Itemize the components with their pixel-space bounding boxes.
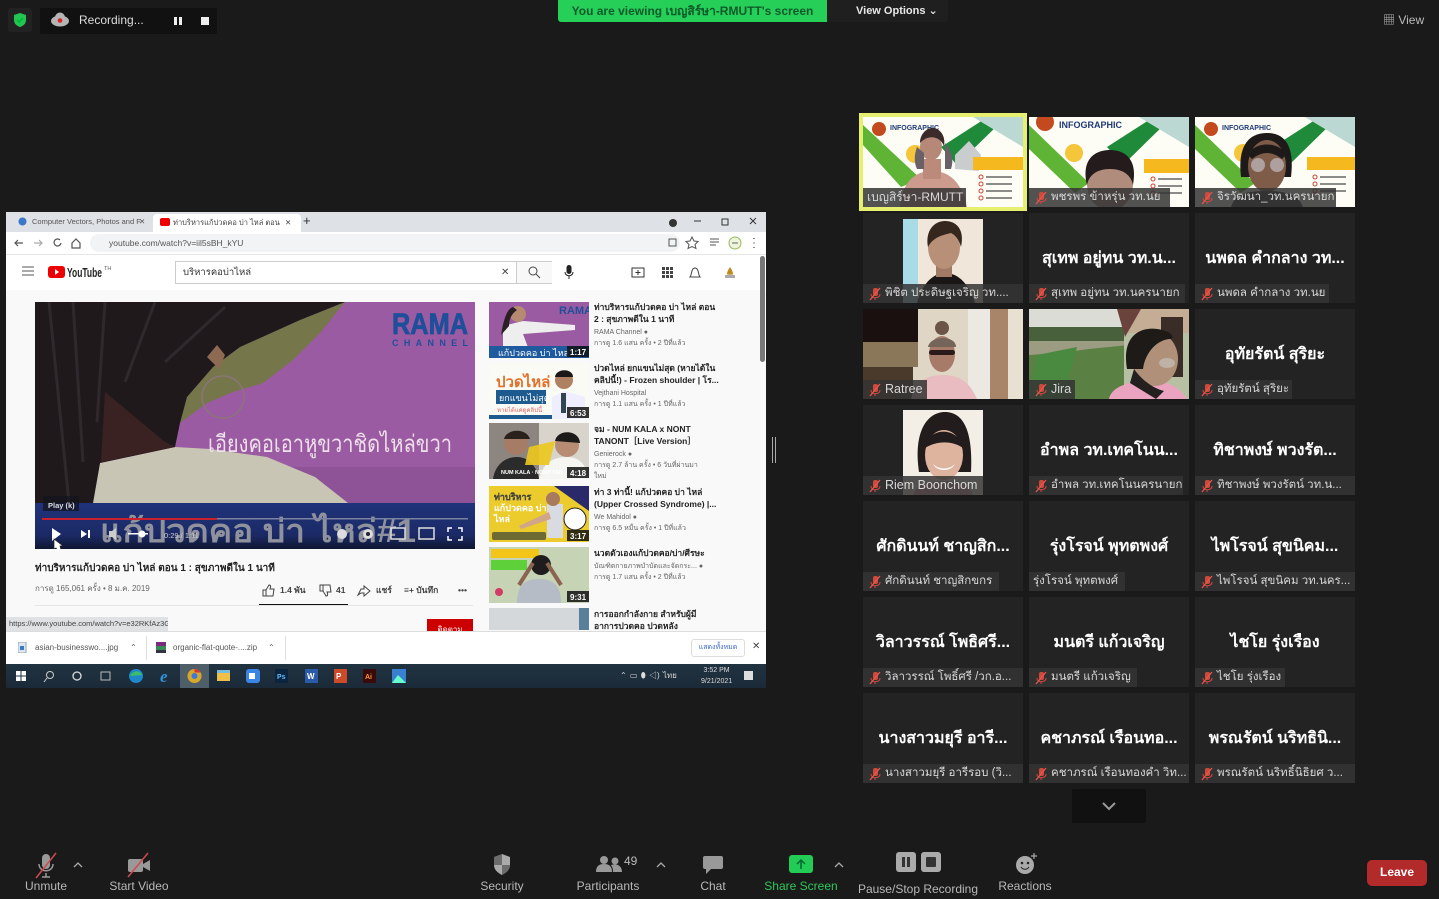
thumbnail 2: ปวดไหล่ xyxy=(496,372,550,391)
tile: Riem Boonchom xyxy=(863,405,1023,495)
name label xyxy=(1029,764,1189,783)
thumbnail 2: หายได้แค่ดูคลิปนี้ xyxy=(497,404,543,414)
file name 2: organic-flat-quote-....zip xyxy=(173,643,257,652)
name label: อำพล วท.เทคโนนครนายก xyxy=(1051,479,1182,491)
toolbar button: share screen xyxy=(762,850,840,896)
title 3 xyxy=(594,424,696,446)
toolbar button: participants xyxy=(572,850,644,896)
name label: ไพโรจน์ สุขนิคม วท.นคร... xyxy=(1217,575,1350,587)
name label xyxy=(1195,476,1355,495)
notification icon xyxy=(744,671,753,680)
display name: อุทัยรัตน์ สุริยะ xyxy=(1225,346,1325,363)
share action: แชร์ xyxy=(376,585,392,595)
save action: ≡+ บันทึก xyxy=(404,585,438,595)
meta 5 xyxy=(594,562,703,581)
tile: รุ่งโรจน์ xyxy=(1029,501,1189,591)
display name: ไชโย รุ่งเรือง xyxy=(1230,634,1320,651)
photo: presenter with infographic background xyxy=(863,117,1023,207)
title 4: (Upper Crossed Syndrome) |... xyxy=(594,499,716,509)
gallery view button: ▦ View xyxy=(1383,13,1424,27)
scrollbar xyxy=(760,256,765,362)
display name: ทิชาพงษ์ พวงรัต... xyxy=(1213,442,1337,459)
tile: นางสาวมยุรี xyxy=(863,693,1023,783)
toolbar button: chat xyxy=(695,850,731,896)
title 2 xyxy=(594,363,719,385)
url field: youtube.com/watch?v=iil5sBH_kYU xyxy=(109,238,243,248)
meta 2: Vejthani Hospital xyxy=(594,390,646,397)
display name: นพดล คำกลาง วท... xyxy=(1205,250,1345,267)
name label xyxy=(1029,572,1125,591)
title 1: ท่าบริหารแก้ปวดคอ บ่า ไหล่ ตอน xyxy=(594,302,715,312)
photo: participant with infographic background xyxy=(1029,117,1189,207)
address bar xyxy=(6,232,766,254)
next page arrow button xyxy=(1072,789,1146,823)
display name: ศักดินนท์ ชาญสิก... xyxy=(876,538,1010,555)
photo: participant with glasses: INFOGRAPHIC xyxy=(1222,125,1271,132)
recording label: Recording... xyxy=(79,13,144,27)
tile: นพดล คำกลาง xyxy=(1195,213,1355,303)
meta 1: การดู 1.6 แสน ครั้ง • 2 ปีที่แล้ว xyxy=(594,340,685,347)
subscribe button: ติดตาม xyxy=(437,625,463,634)
window controls xyxy=(669,218,756,227)
tile: ทิชาพงษ์ xyxy=(1195,405,1355,495)
meta 3: ใหม่ xyxy=(594,473,607,480)
search box: บริหารคอบ่าไหล่ xyxy=(183,267,251,278)
name label: ทิชาพงษ์ พวงรัตน์ วท.น... xyxy=(1217,479,1342,491)
name label xyxy=(863,380,927,399)
thumbnail 5 xyxy=(489,547,589,603)
label: Chat xyxy=(700,879,726,893)
participant count: 49 xyxy=(624,854,637,868)
name label xyxy=(863,668,1023,687)
display name: รุ่งโรจน์ พุทตพงศ์ xyxy=(1050,538,1168,555)
name label: วิลาวรรณ์ โพธิ์ศรี /วก.อ... xyxy=(885,671,1011,683)
display name: คชาภรณ์ เรือนทอ... xyxy=(1040,730,1178,747)
browser tab strip xyxy=(6,212,766,232)
side video 2 xyxy=(489,363,719,419)
more action: ••• xyxy=(458,585,467,595)
close button: ✕ xyxy=(752,641,760,652)
name label: พิชิต ประดิษฐเจริญ วท.... xyxy=(885,287,1009,299)
tile: พรณรัตน์ xyxy=(1195,693,1355,783)
name label: พรณรัตน์ นริทธิ์นิธิยศ ว... xyxy=(1217,767,1343,779)
video: woman in room xyxy=(863,309,1023,399)
name label: นางสาวมยุรี อารีรอบ (วิ... xyxy=(885,767,1012,779)
name label: ศักดินนท์ ชาญสิกขกร xyxy=(885,575,992,587)
leave button: Leave xyxy=(1380,865,1414,879)
main video player: CHANNEL xyxy=(392,338,468,348)
display name: พรณรัตน์ นริทธินิ... xyxy=(1209,730,1341,747)
icon: muted microphone xyxy=(34,852,58,880)
meta 4: We Mahidol ● xyxy=(594,514,637,521)
name label: เบญสิร์ษา-RMUTT xyxy=(867,190,963,204)
taskbar chrome highlight xyxy=(180,664,209,688)
video title: ท่าบริหารแก้ปวดคอ บ่า ไหล่ ตอน 1 : สุขภาพดีใน 1 นาที xyxy=(35,563,275,574)
chevron 1: ⌃ xyxy=(130,643,137,652)
tile: คชาภรณ์ xyxy=(1029,693,1189,783)
display name: วิลาวรรณ์ โพธิศรี... xyxy=(876,634,1010,651)
share options caret xyxy=(834,861,844,869)
like ratio bar xyxy=(259,604,348,605)
photo: participant with glasses xyxy=(1195,117,1355,207)
clock xyxy=(701,665,732,687)
name label: รุ่งโรจน์ พุทตพงศ์ xyxy=(1033,575,1118,587)
display name: สุเทพ อยู่ทน วท.น... xyxy=(1042,250,1176,267)
name label xyxy=(863,188,966,207)
thumbnail 4: แก้ปวดคอ บ่า xyxy=(494,503,547,513)
title 6: อาการปวดคอ ปวดหลัง xyxy=(594,621,678,631)
title 3: TANONT［Live Version］ xyxy=(594,436,696,446)
video: woman outdoors by river xyxy=(1029,309,1189,399)
thumbnail 1: 1:17 xyxy=(570,348,587,357)
thumbnail 4: ท่าบริหาร xyxy=(494,492,532,502)
header action icons xyxy=(632,267,735,278)
name label: จิรวัฒนา_วท.นครนายก xyxy=(1217,191,1334,203)
name label: อุทัยรัตน์ สุริยะ xyxy=(1217,383,1289,395)
name label: สุเทพ อยู่ทน วท.นครนายก xyxy=(1051,287,1180,299)
icon: people xyxy=(596,855,622,873)
security shield icon xyxy=(14,13,26,27)
url field xyxy=(90,234,680,252)
thumbnail 2: 6:53 xyxy=(570,409,587,418)
tile: Ratree xyxy=(863,309,1023,399)
tile: มนตรี xyxy=(1029,597,1189,687)
participants caret xyxy=(656,861,666,869)
search clear: ✕ xyxy=(501,267,509,278)
toolbar button: start video xyxy=(104,850,174,896)
name label xyxy=(863,764,1023,783)
meta 4 xyxy=(594,514,686,532)
main video player: 0:29 / 1:11 xyxy=(164,531,199,540)
label: Participants xyxy=(577,879,639,893)
thumbnail 2 xyxy=(489,370,589,419)
tile: จิรวัฒนา xyxy=(1195,117,1355,207)
icon: pause and stop xyxy=(896,852,942,872)
taskbar icons: e xyxy=(160,667,168,686)
tile: พิชิต ประดิษฐเจริญ xyxy=(863,213,1023,303)
icon: chat bubble xyxy=(702,855,724,875)
name label: Jira xyxy=(1051,382,1071,396)
like count: 1.4 พัน xyxy=(280,585,306,595)
toolbar button: security xyxy=(475,850,529,896)
icon: stopped camera xyxy=(126,852,152,878)
meta 5: การดู 1.7 แสน ครั้ง • 2 ปีที่แล้ว xyxy=(594,574,685,581)
icon: recording cloud xyxy=(51,12,69,26)
thumbnail 3: NUM KALA · NONT TAN xyxy=(501,470,563,476)
inactive tab close: ✕ xyxy=(139,217,145,226)
dislike count: 41 xyxy=(336,585,345,595)
name label xyxy=(1195,380,1292,399)
microphone icon xyxy=(564,265,574,279)
file icon 1 xyxy=(18,642,26,653)
name label: Ratree xyxy=(885,382,923,396)
name label xyxy=(1195,668,1285,687)
label: Pause/Stop Recording xyxy=(858,882,978,896)
download item 2 xyxy=(154,636,286,660)
thumbnail 4: 3:17 xyxy=(570,532,587,541)
thumbnail 3: 4:18 xyxy=(570,469,587,478)
meta 1: RAMA Channel ● xyxy=(594,329,648,336)
title 4: ท่า 3 ท่านี้! แก้ปวดคอ บ่า ไหล่ xyxy=(594,487,702,497)
navigation icons xyxy=(14,238,81,249)
meta 3 xyxy=(594,450,698,480)
meta 3: Genierock ● xyxy=(594,451,632,458)
show all button: แสดงทั้งหมด xyxy=(699,644,737,651)
download bar xyxy=(6,631,766,664)
avatar photo: smiling woman xyxy=(903,410,983,495)
icon: smiley plus xyxy=(1014,852,1038,876)
name label xyxy=(1029,668,1137,687)
youtube logo xyxy=(48,266,111,280)
display name: นางสาวมยุรี อารี... xyxy=(879,730,1007,747)
toolbar button: pause stop recording xyxy=(855,850,981,898)
name label xyxy=(1029,188,1170,207)
like dislike share save row xyxy=(262,584,467,597)
name label xyxy=(1195,764,1355,783)
file icon 2 xyxy=(156,642,166,653)
meta 5: บัณฑิตกายภาพบำบัดและจัดกระ... ● xyxy=(594,563,703,570)
tile: ศักดินนท์ xyxy=(863,501,1023,591)
taskbar icons: W xyxy=(307,672,315,681)
menu icon xyxy=(22,266,34,276)
active speaker highlight border xyxy=(859,113,1027,211)
thumbnail 5: 9:31 xyxy=(570,593,587,602)
meta 2: การดู 1.1 แสน ครั้ง • 1 ปีที่แล้ว xyxy=(594,401,685,408)
title 2: ปวดไหล่ ยกแขนไม่สุด (หายได้ใน xyxy=(594,363,715,373)
tile: อุทัยรัตน์ สุริยะ xyxy=(1195,309,1355,399)
active tab close: ✕ xyxy=(285,218,291,227)
title 6 xyxy=(594,609,696,631)
main video player xyxy=(35,302,475,549)
side video 3 xyxy=(489,423,698,480)
name label: Riem Boonchom xyxy=(885,478,977,492)
recording indicator xyxy=(40,8,217,34)
browser toolbar icons xyxy=(668,236,755,250)
meta 4: การดู 6.5 หมื่น ครั้ง • 1 ปีที่แล้ว xyxy=(594,525,686,532)
title 1: 2 : สุขภาพดีใน 1 นาที xyxy=(594,314,674,324)
thumbnail 1 xyxy=(489,302,589,358)
label: Share Screen xyxy=(764,879,838,893)
name label xyxy=(1195,572,1355,591)
subscribe button xyxy=(427,619,473,639)
tile: วิลาวรรณ์ xyxy=(863,597,1023,687)
main video player: Play (k) xyxy=(48,501,75,510)
splitter handle xyxy=(772,437,776,463)
name label: ไชโย รุ่งเรือง xyxy=(1217,671,1281,683)
toolbar button: reactions xyxy=(995,850,1055,896)
icon: shield xyxy=(492,853,512,877)
tile: ไชโย xyxy=(1195,597,1355,687)
display name: มนตรี แก้วเจริญ xyxy=(1054,634,1164,651)
clock: 3:52 PM xyxy=(704,667,730,674)
name label xyxy=(1029,284,1185,303)
main video player: แก้ปวดคอ บ่า ไหล่#1 xyxy=(100,512,416,549)
search button xyxy=(516,262,552,283)
title 1 xyxy=(594,302,716,324)
label: Reactions xyxy=(998,879,1052,893)
thumbnail 4 xyxy=(489,486,589,542)
new tab plus: + xyxy=(303,213,311,228)
name label xyxy=(1029,476,1183,495)
taskbar icons: P xyxy=(336,672,342,681)
name label: พชรพร ข้าหรุ่น วท.นย xyxy=(1051,191,1160,203)
label: Security xyxy=(480,879,524,893)
hover url tooltip xyxy=(6,617,168,631)
display name: อำพล วท.เทคโนน... xyxy=(1040,442,1178,459)
audio options caret xyxy=(73,861,83,869)
thumbnail 4: ไหล่ xyxy=(493,513,510,524)
side video 6 xyxy=(489,608,696,631)
title 5: นวดตัวเองแก้ปวดคอ/บ่า/ศีรษะ xyxy=(594,548,705,558)
divider line xyxy=(35,605,473,606)
side video 5 xyxy=(489,547,705,603)
tile: เบญสิร์ษา-RMUTT xyxy=(863,117,1023,207)
file name 1: asian-businesswo....jpg xyxy=(35,643,118,652)
clock: 9/21/2021 xyxy=(701,678,732,685)
tile: สุเทพ อยู่ทน xyxy=(1029,213,1189,303)
name label xyxy=(863,572,999,591)
name label xyxy=(1195,188,1336,207)
download item 1 xyxy=(18,636,147,660)
name label xyxy=(863,284,1023,303)
panel: shared browser screen xyxy=(6,212,766,688)
system tray: ⌃ ▭ ⬮ ◁) ไทย xyxy=(620,671,677,680)
meta 1 xyxy=(594,328,685,347)
display name: ไพโรจน์ สุขนิคม... xyxy=(1212,538,1338,555)
youtube logo: TH xyxy=(104,266,111,272)
youtube header xyxy=(6,254,766,290)
tile: พชรพร ข้าหรุ่น xyxy=(1029,117,1189,207)
inactive tab title: Computer Vectors, Photos and F xyxy=(32,217,141,226)
windows taskbar xyxy=(6,664,766,688)
taskbar icons: Ps xyxy=(277,674,286,681)
active tab xyxy=(153,214,301,232)
view options button: View Options ⌄ xyxy=(856,5,938,17)
video view count: การดู 165,061 ครั้ง • 8 ม.ค. 2019 xyxy=(35,584,150,593)
photo: presenter with infographic background: INFOGRAPHIC xyxy=(890,125,939,132)
name label xyxy=(1029,380,1075,399)
name label: มนตรี แก้วเจริญ xyxy=(1051,671,1131,683)
title 3: จม - NUM KALA x NONT xyxy=(594,424,691,434)
leave button xyxy=(1367,860,1427,886)
thumbnail 1: แก้ปวดคอ บ่า ไหล่ xyxy=(498,348,569,358)
toolbar button: unmute xyxy=(20,850,72,896)
recording pause and stop buttons xyxy=(174,17,209,25)
thumbnail 2: ยกแขนไม่สุด xyxy=(499,393,550,404)
photo: participant with infographic background: INFOGRAPHIC xyxy=(1059,120,1123,130)
name label xyxy=(863,476,983,495)
like and dislike and share icons xyxy=(262,584,371,597)
thumbnail 3 xyxy=(489,423,589,479)
taskbar icons xyxy=(6,664,416,688)
active tab favicon xyxy=(160,218,170,226)
name label: นพดล คำกลาง วท.นย xyxy=(1217,287,1325,299)
title 2: คลิปนี้!) - Frozen shoulder | โร... xyxy=(594,375,719,385)
title 4 xyxy=(594,486,716,509)
viewing banner: You are viewing เบญสิร์ษา-RMUTT's screen xyxy=(572,4,813,18)
chevron 2: ⌃ xyxy=(268,643,275,652)
tile: ไพโรจน์ xyxy=(1195,501,1355,591)
name label: คชาภรณ์ เรือนทองคำ วิท... xyxy=(1051,767,1187,779)
meta 3: การดู 2.7 ล้าน ครั้ง • 6 วันที่ผ่านมา xyxy=(594,462,698,469)
taskbar icons: Ai xyxy=(365,674,372,681)
inactive tab favicon xyxy=(18,218,26,226)
inactive tab xyxy=(18,217,145,226)
side video 1 xyxy=(489,302,716,358)
meta 2 xyxy=(594,390,685,408)
label: Start Video xyxy=(109,879,169,893)
avatar photo: man xyxy=(903,219,983,303)
view options button xyxy=(827,0,948,22)
side video 4 xyxy=(489,486,716,542)
tile: Jira xyxy=(1029,309,1189,399)
icon: share arrow xyxy=(789,855,813,873)
viewing banner xyxy=(558,0,827,22)
thumbnail 6 xyxy=(489,608,589,630)
title 6: การออกกำลังกาย สำหรับผู้มี xyxy=(594,609,696,619)
label: Unmute xyxy=(25,879,67,893)
name label xyxy=(1195,284,1329,303)
tile: อำพล xyxy=(1029,405,1189,495)
search box xyxy=(175,261,552,284)
show all button xyxy=(691,639,745,657)
